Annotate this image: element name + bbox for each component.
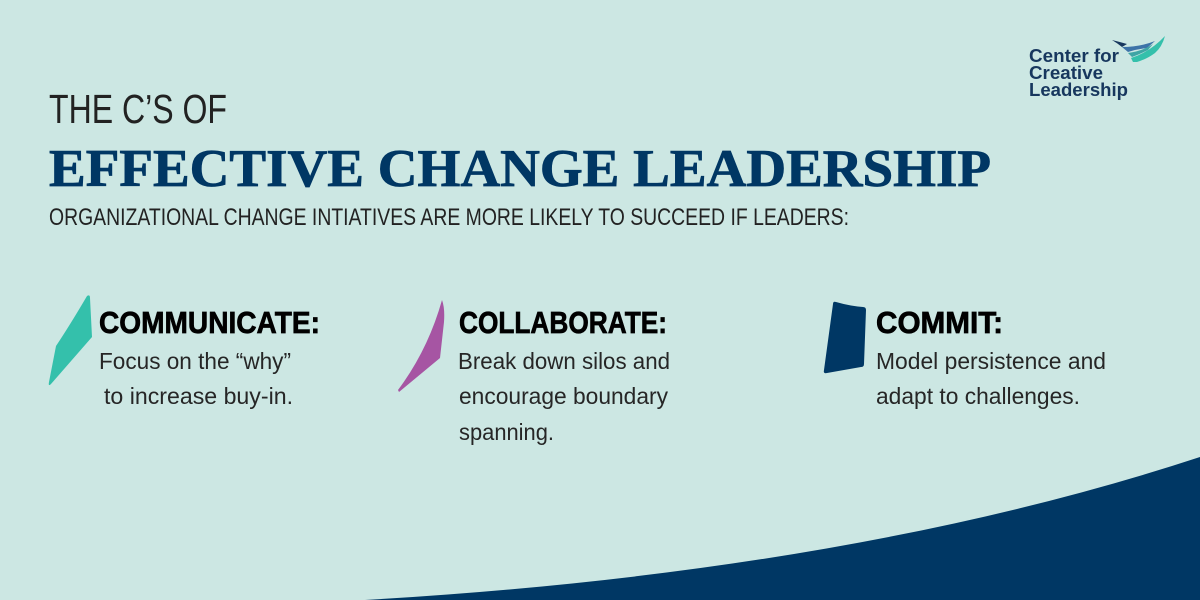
panel: collaborate: [398, 300, 670, 445]
text: commit description: Model persistence and: [876, 348, 1106, 374]
text: collaborate description: [458, 348, 670, 445]
heading: commit: COMMIT:: [876, 305, 1003, 340]
subtitle: ORGANIZATIONAL CHANGE INTIATIVES ARE MORE LIKELY TO SUCCEED IF LEADERS:: [49, 204, 849, 231]
text: collaborate description: encourage boundary: [459, 383, 668, 409]
title line: The C's of: THE C’S OF: [49, 86, 227, 132]
title block: [49, 86, 991, 231]
logo: Center for Creative Leadership: [1029, 36, 1165, 100]
text: communicate description: Focus on the “why”: [99, 348, 291, 374]
panel: commit: [824, 302, 1106, 409]
heading: collaborate: COLLABORATE:: [459, 305, 667, 340]
title line: Effective Change Leadership: EFFECTIVE CHANGE LEADERSHIP: [49, 140, 991, 198]
text: collaborate description: spanning.: [459, 419, 554, 445]
panel: communicate: [49, 295, 320, 409]
text: commit description: adapt to challenges.: [876, 383, 1080, 409]
logo wordmark: Creative: [1029, 62, 1103, 83]
logo swoosh icon: [1112, 36, 1165, 62]
text: collaborate description: Break down silos and: [458, 348, 670, 374]
logo wordmark: Center for: [1029, 45, 1119, 66]
icon: teal shard: [49, 295, 92, 385]
text: communicate description: to increase buy-in.: [104, 383, 293, 409]
logo wordmark: [1029, 45, 1128, 100]
heading: communicate: COMMUNICATE:: [99, 305, 320, 340]
navy corner curve: [365, 457, 1200, 600]
logo wordmark: Leadership: [1029, 79, 1128, 100]
icon: navy shard: [824, 302, 866, 373]
text: commit description: [876, 348, 1106, 409]
text: communicate description: [99, 348, 293, 409]
icon: purple shard: [398, 300, 444, 392]
